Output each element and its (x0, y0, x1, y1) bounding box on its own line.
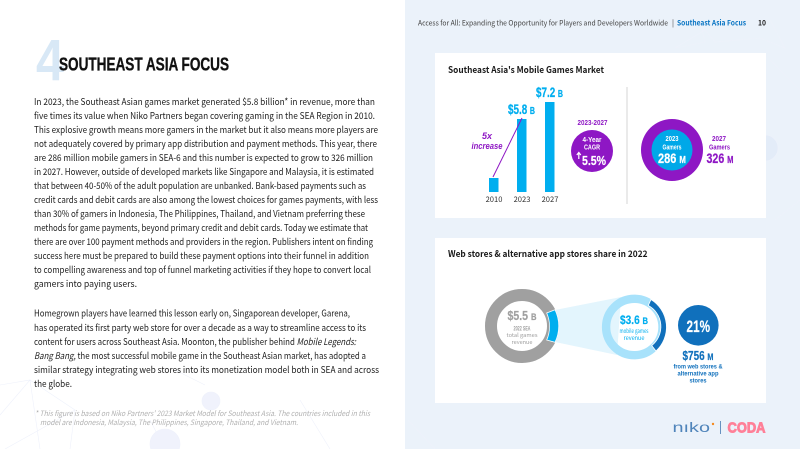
footnote (35, 408, 370, 428)
body paragraph 1: methods for game payments, beyond primary credit and debit cards. Today we estimate that (34, 220, 368, 234)
body paragraph 1: are 286 million mobile gamers in SEA-6 and this number is expected to grow to 326 million (34, 150, 373, 164)
body paragraph 2: content for users across Southeast Asia. Moonton, the publisher behind Mobile Legends: (34, 334, 357, 348)
mobile revenue donut (606, 299, 666, 355)
body paragraph 1: than 30% of gamers in Indonesia, The Philippines, Thailand, and Vietnam preferring these (34, 206, 365, 220)
body paragraph 2: has operated its first party web store for over a decade as a way to streamline access to its (34, 320, 366, 334)
zoom cone (555, 297, 621, 355)
body paragraph 2: Bang Bang, the most successful mobile game in the Southeast Asian market, has adopted a (34, 348, 366, 362)
mobile revenue donut: $3.6 B (620, 313, 648, 327)
bar chart: market revenue (472, 84, 563, 205)
page header: | (672, 18, 674, 28)
logo: CODA: CODA (728, 420, 766, 436)
share callout: $756 M (682, 348, 714, 363)
gamers circles (641, 119, 734, 181)
share callout (674, 305, 723, 384)
footnote: * This figure is based on Niko Partners' 2023 Market Model for Southeast Asia. The countries included in this (35, 408, 370, 419)
panel: web stores share (435, 238, 766, 403)
body paragraph 1: that between 40-50% of the adult population are unbanked. Bank-based payments such as (34, 178, 366, 192)
CAGR callout: 5.5% (582, 153, 606, 168)
total revenue donut (491, 295, 559, 357)
body paragraph 1: five times its value when Niko Partners began covering gaming in the SEA Region in 2010. (34, 108, 375, 122)
share callout: stores (690, 378, 707, 384)
body paragraph 1 (34, 94, 378, 290)
total revenue donut: $5.5 B (508, 309, 537, 323)
share callout: from web stores & (674, 364, 723, 370)
total revenue donut: total games (506, 331, 538, 339)
footnote: model are Indonesia, Malaysia, The Philippines, Singapore, Thailand, and Vietnam. (40, 417, 298, 428)
body paragraph 1: In 2023, the Southeast Asian games market generated $5.8 billion* in revenue, more than (34, 94, 375, 108)
bar chart: market revenue: 2010 (486, 194, 502, 205)
bar chart: market revenue: $7.2 B (536, 84, 563, 100)
body paragraph 1: there are over 100 payment methods and providers in the region. Publishers intent on finding (34, 234, 374, 248)
share callout: 21% (687, 318, 710, 336)
panel heading: web stores share: Web stores & alternative app stores share in 2022 (448, 247, 648, 260)
arrow: growth (577, 152, 581, 159)
CAGR callout: CAGR (584, 144, 600, 152)
section heading: SOUTHEAST ASIA FOCUS (59, 55, 229, 75)
mobile revenue donut: mobile games (620, 326, 649, 335)
body paragraph 1: success here must be prepared to build these payment options into their funnel in addition (34, 248, 369, 262)
gamers circles: Gamers (709, 144, 730, 152)
logo: niko: nıko (672, 419, 710, 435)
gamers circles: 2023 (666, 136, 679, 143)
body paragraph 2: Homegrown players have learned this lesson early on, Singaporean developer, Garena, (34, 306, 350, 320)
bar chart: market revenue: 2027 (542, 194, 558, 205)
body paragraph 2: similar strategy integrating web stores into its monetization model both in SEA and across (34, 362, 379, 376)
gamers circles: Gamers (662, 144, 682, 152)
body paragraph 1: to compelling awareness and top of funnel marketing activities if they hope to convert local (34, 262, 371, 276)
body paragraph 2 (34, 306, 379, 390)
CAGR callout: 2023-2027 (578, 118, 608, 127)
body paragraph 1: not adequately covered by primary app distribution and payment methods. This year, there (34, 136, 377, 150)
bar chart: market revenue: 2023 (514, 194, 530, 205)
panel: mobile games market (435, 53, 766, 218)
CAGR callout: 4-Year (582, 137, 602, 144)
gamers circles: 286 M (658, 150, 686, 166)
mobile revenue donut: revenue (624, 333, 644, 342)
logo: niko (672, 419, 714, 435)
panel heading: mobile games market: Southeast Asia's Mobile Games Market (448, 63, 604, 76)
gamers circles: 326 M (706, 150, 734, 166)
gamers circles: 2027 (712, 136, 726, 143)
body paragraph 1: gamers into paying users. (34, 276, 137, 290)
bar chart: market revenue: 5x (482, 131, 493, 141)
body paragraph 1: This explosive growth means more gamers in the market but it also means more players are (34, 122, 378, 136)
total revenue donut: 2022 SEA (514, 326, 531, 332)
bar chart: market revenue: $5.8 B (508, 101, 535, 117)
total revenue donut: revenue (512, 338, 532, 346)
body paragraph 2: the globe. (34, 376, 72, 390)
share callout: alternative app (678, 370, 719, 378)
page header: Southeast Asia Focus (677, 18, 746, 28)
section number 4: 4 (36, 28, 64, 93)
page header: 10 (758, 18, 767, 28)
CAGR callout (571, 118, 613, 172)
bar chart: market revenue: increase (472, 141, 502, 151)
page header: Access for All: Expanding the Opportunity for Players and Developers Worldwide (418, 18, 668, 28)
body paragraph 1: in 2027. However, outside of developed markets like Singapore and Malaysia, it is estimated (34, 164, 374, 178)
body paragraph 1: credit cards and debit cards are also among the lowest choices for games payments, with less (34, 192, 378, 206)
